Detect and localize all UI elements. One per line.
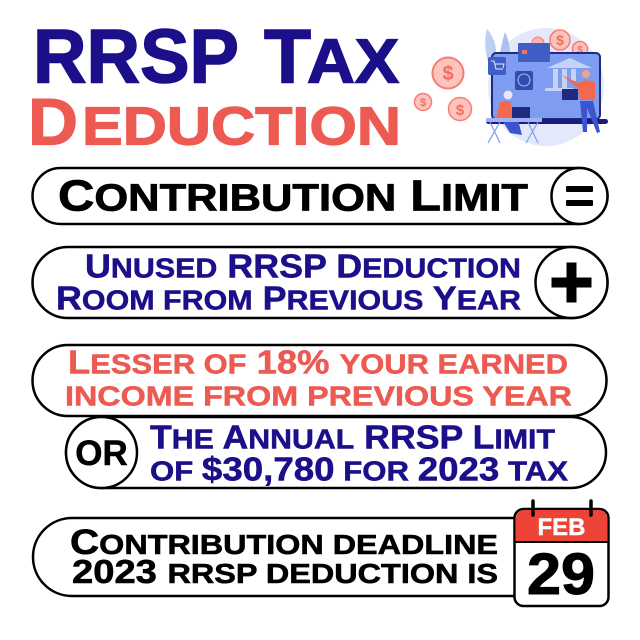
icon: or circle: [66, 417, 137, 488]
title: RRSP Tax: RRSP: [33, 14, 239, 100]
label: contribution limit: CONTRIBUTION LIMIT: [58, 172, 528, 220]
text line: contribution deadline: CONTRIBUTION DEADLINE: [70, 523, 498, 562]
title: RRSP Tax: T: [264, 14, 311, 100]
illustration: online banking laptop: $: [556, 32, 564, 48]
text line: income from previous year: INCOME FROM PREVIOUS YEAR: [65, 380, 572, 412]
icon: calendar Feb 29: [514, 501, 608, 607]
icon: calendar Feb 29: 29: [527, 542, 595, 607]
icon: calendar Feb 29: FEB: [538, 514, 586, 541]
title: Deduction: EDUCTION: [82, 96, 401, 156]
icon: medium dollar coin: $: [456, 102, 465, 119]
text line: of $30,780 for 2023 tax: OF $30,780 FOR 2023 TAX: [150, 450, 568, 488]
title: RRSP Tax: [33, 14, 399, 100]
panel: contribution limit: [32, 168, 608, 224]
panel: unused deduction room: [32, 247, 608, 318]
icon: small dollar coin: $: [420, 97, 426, 109]
title: Deduction: D: [28, 84, 78, 158]
illustration: online banking laptop: $: [577, 45, 583, 56]
panel: contribution deadline: [33, 518, 515, 596]
text line: lesser of 18% your earned: LESSER OF 18% YOUR EARNED: [68, 344, 568, 380]
icon: or circle: OR: [75, 434, 128, 473]
illustration: online banking laptop: [485, 28, 608, 146]
text line: 2023 rrsp deduction is: 2023 RRSP DEDUCTION IS: [72, 553, 498, 590]
panel: annual RRSP limit: [66, 417, 606, 488]
icon: plus circle: [536, 247, 608, 318]
title: RRSP Tax: AX: [307, 28, 399, 96]
icon: medium dollar coin: [448, 98, 472, 120]
title: Deduction: [28, 84, 401, 158]
text line: room from previous year: ROOM FROM PREVIOUS YEAR: [56, 280, 521, 316]
text line: the annual RRSP limit: THE ANNUAL RRSP L IMIT: [150, 418, 555, 456]
icon: large dollar coin: $: [442, 63, 454, 85]
panel: lesser of 18%: [32, 344, 606, 416]
icon: small dollar coin: [414, 94, 432, 110]
icon: equals circle: [552, 168, 608, 224]
text line: unused RRSP deduction: UNUSED RRSP D EDUCTION: [85, 248, 521, 284]
icon: large dollar coin: [432, 58, 464, 88]
